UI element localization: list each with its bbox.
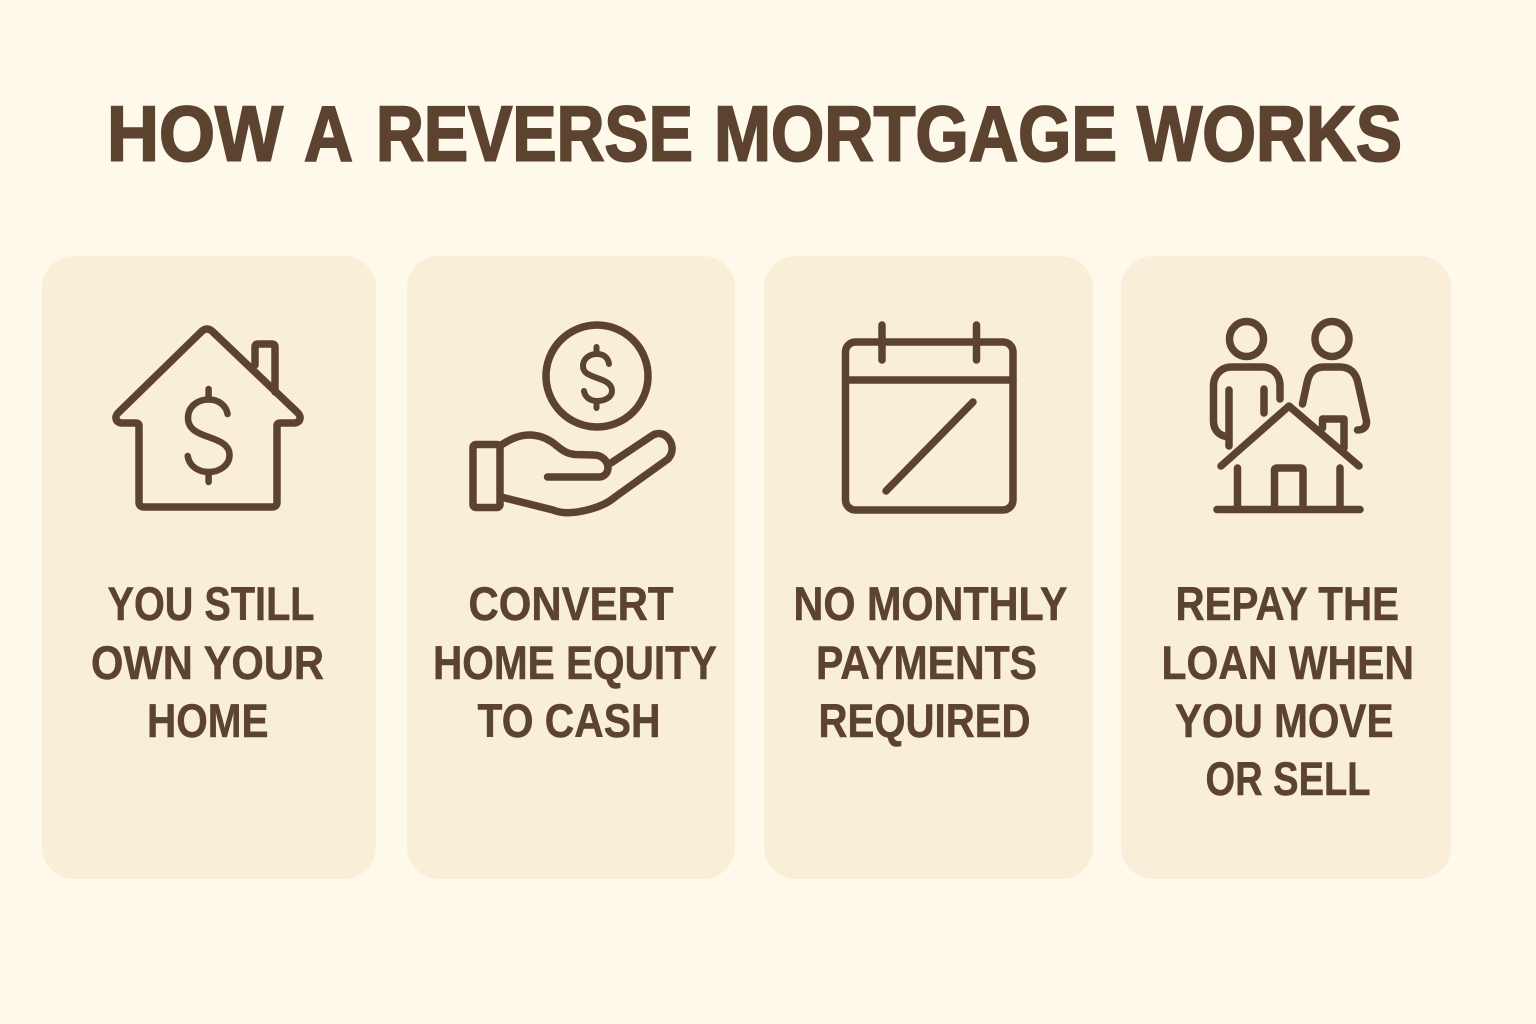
label: no monthly payments required: PAYMENTS (816, 636, 1037, 689)
label: convert home equity to cash: TO CASH (478, 694, 660, 747)
label: convert home equity to cash: HOME EQUITY (433, 636, 717, 689)
label: repay the loan when you move or sell: REPAY THE (1176, 577, 1399, 630)
label: you still own your home: OWN YOUR (91, 636, 324, 689)
title: A (304, 90, 353, 178)
label: repay the loan when you move or sell: YOU MOVE (1175, 694, 1394, 747)
panel: convert home equity to cash (407, 256, 735, 879)
label: you still own your home: HOME (147, 694, 268, 747)
title: MORTGAGE (714, 90, 1117, 178)
label: repay the loan when you move or sell: OR SELL (1206, 752, 1370, 805)
title: REVERSE (376, 90, 693, 178)
title (107, 90, 1402, 178)
panel: repay the loan (1121, 256, 1451, 879)
icon: calendar (846, 325, 1013, 510)
label: repay the loan when you move or sell: LOAN WHEN (1162, 636, 1414, 689)
label: no monthly payments required: NO MONTHLY (794, 577, 1068, 630)
icon: hand holding coin (473, 325, 672, 513)
icon: couple with house (1214, 322, 1367, 510)
label: you still own your home (91, 577, 324, 747)
label: convert home equity to cash (433, 577, 717, 747)
label: repay the loan when you move or sell (1162, 577, 1414, 805)
label: convert home equity to cash: CONVERT (468, 577, 674, 630)
label: you still own your home: YOU STILL (108, 577, 314, 630)
icon: house with dollar sign (116, 329, 300, 507)
label: no monthly payments required: REQUIRED (818, 694, 1030, 747)
title: HOW (107, 90, 283, 178)
label: no monthly payments required (794, 577, 1068, 747)
panel: no monthly payments required (764, 256, 1093, 879)
panel: you still own your home (42, 256, 376, 879)
title: WORKS (1137, 90, 1402, 178)
